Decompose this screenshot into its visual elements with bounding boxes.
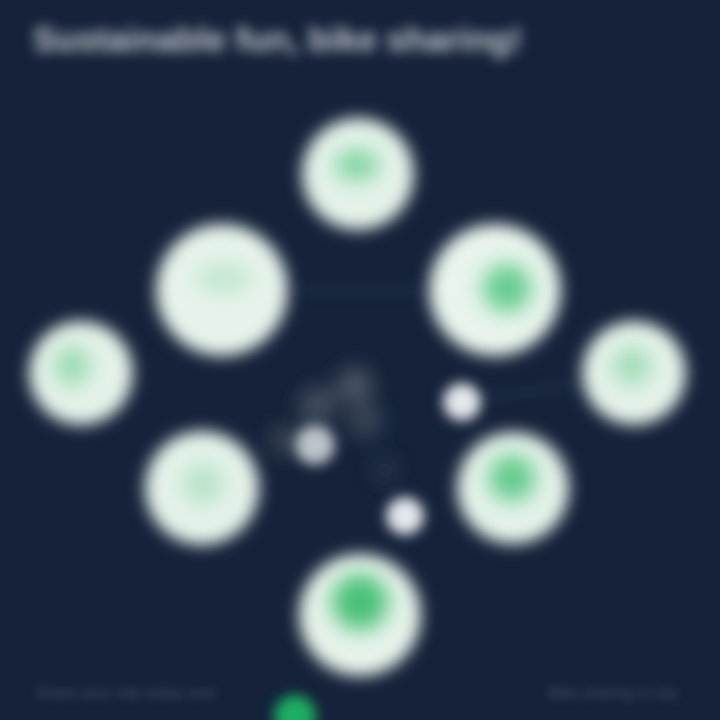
node: upper left circle [156, 224, 288, 356]
node: top circle [302, 118, 414, 230]
node: bottom circle [299, 554, 421, 676]
small node: left [295, 425, 335, 465]
title: Sustainable fun, bike sharing! [33, 21, 522, 59]
node: lower left circle [145, 431, 259, 545]
connector lines [300, 290, 580, 420]
node: far left circle [29, 321, 133, 425]
node: upper right circle [429, 224, 561, 356]
bottom green badge [274, 695, 316, 720]
central gray cluster [270, 367, 398, 483]
small node: bottom [386, 497, 424, 535]
node: far right circle [582, 321, 686, 425]
footer right text: Bike sharing in city [548, 685, 677, 702]
footer left text: Share your ride today now [35, 685, 216, 702]
small node: right [443, 383, 481, 421]
node: lower right circle [457, 432, 569, 544]
